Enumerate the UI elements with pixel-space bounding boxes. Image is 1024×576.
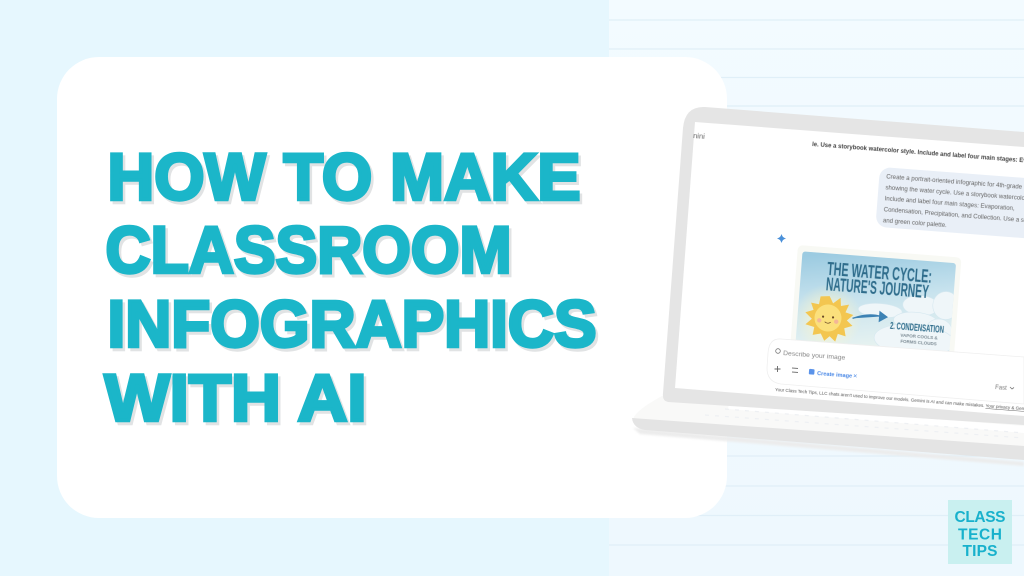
image: title: THE WATER CYCLE: [826,259,933,287]
generated water cycle image [791,246,961,352]
image: sun [806,296,854,342]
image: title [825,259,933,302]
logo: TIPS [962,543,998,560]
logo: CLASS [954,509,1006,526]
image: title: NATURE'S JOURNEY [825,274,930,302]
title shadow: HOW TO MAKE [110,142,583,216]
icon: plus [774,366,780,372]
image: clouds [858,292,954,351]
title text: INFOGRAPHICS [108,286,596,360]
title text: CLASSROOM [106,212,512,286]
background: right striped panel [609,0,1024,576]
panel: white title card [57,57,727,518]
icon: create image chip [809,369,815,375]
icon: shield [776,349,780,353]
disclaimer: Your Class Tech Tips, LLC chats aren't used to improve our models. Gemini is AI and can make mistakes. Your privacy & Gemini [775,387,1024,412]
laptop base [632,396,1024,466]
icon: chevron [1010,387,1014,389]
icon: close: × [853,373,857,380]
image: sky [795,251,956,363]
screen: prompt bubble: Create a portrait-oriented infographic for 4th-grade [886,173,1023,191]
logo [948,500,1012,564]
title shadow: INFOGRAPHICS [110,289,599,363]
input: model selector: Fast [995,385,1007,392]
screen: prompt bubble: showing the water cycle. Use a storybook watercolor [885,184,1024,202]
laptop lid [663,107,1024,425]
image: caption: VAPOR COOLS & [900,333,939,340]
image: arrow [852,310,887,322]
title text: HOW TO MAKE [108,139,580,213]
image: condensation label: 2. CONDENSATION [890,321,944,336]
input box [767,339,1024,404]
title shadow: WITH AI [107,363,369,437]
screen: prompt bubble [875,167,1024,241]
title text: WITH AI [104,360,366,434]
icon: blue sparkle [778,234,786,242]
screen: prompt bubble: and green color palette. [883,217,947,229]
laptop screen [675,122,1024,416]
laptop [632,107,1024,466]
title text [104,139,596,434]
title shadow: CLASSROOM [108,215,514,289]
icon: tools [792,368,798,372]
image: sun glow [800,288,856,342]
screen: app name: nini [693,131,706,141]
logo: TECH [958,526,1002,544]
input: create image: Create image [817,371,852,380]
title shadow [107,142,599,437]
background: left pale blue [0,0,609,576]
image: caption: FORMS CLOUDS [900,339,937,346]
input: placeholder: Describe your image [783,350,846,362]
image: caption [900,333,939,346]
title [104,139,599,437]
screen: prompt bubble: Include and label four main stages: Evaporation, [884,195,1015,212]
